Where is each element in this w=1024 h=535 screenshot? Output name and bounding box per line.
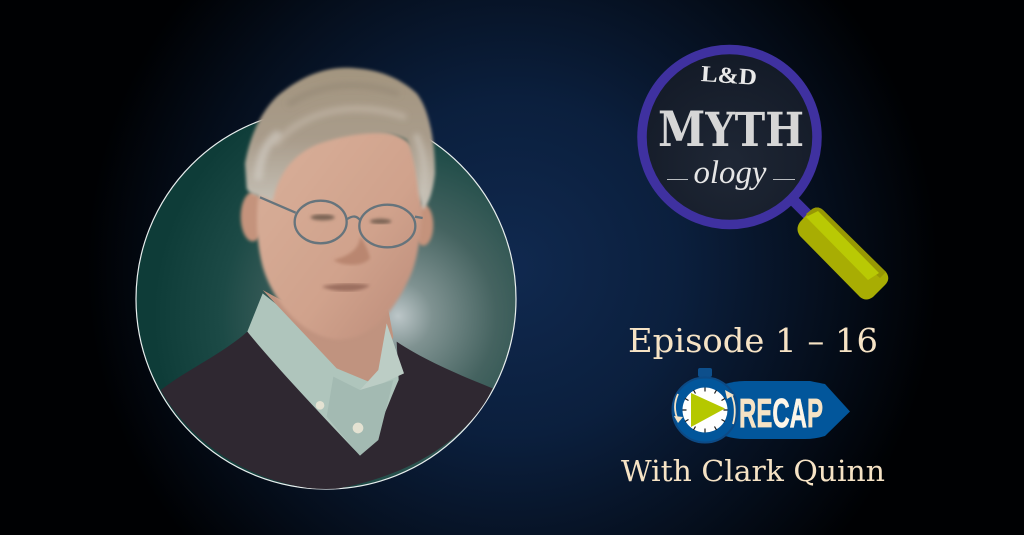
- ears: [241, 192, 433, 246]
- nose shadow: [333, 237, 370, 265]
- shirt placket shading: [327, 377, 393, 456]
- recap banner arrow: [725, 381, 850, 439]
- collar right wing: [360, 323, 404, 390]
- neck: [263, 290, 393, 385]
- logo text: L&D: L&D: [700, 61, 758, 90]
- magnifier rod: [791, 198, 811, 218]
- badge: stopwatch recap: [672, 368, 850, 442]
- logo text: MYTH: MYTH: [658, 100, 804, 158]
- logo side rules: [667, 178, 795, 180]
- stopwatch body: [672, 378, 738, 442]
- mouth: [322, 283, 370, 291]
- stopwatch ticks: [682, 388, 728, 432]
- logo text: ology: ology: [694, 155, 767, 191]
- collar buttons: [316, 401, 363, 433]
- hair highlights: [258, 85, 425, 193]
- glasses: [260, 197, 423, 247]
- face: [257, 124, 422, 339]
- subheading: guest name: With Clark Quinn: [621, 454, 885, 488]
- stopwatch crown: [698, 368, 712, 377]
- logo: L&D Mythology magnifying glass: [642, 50, 888, 300]
- sweater: [161, 332, 493, 490]
- stopwatch face: [682, 388, 728, 432]
- rotation arrows: [675, 394, 735, 424]
- portrait: circular photo of Clark Quinn: [136, 68, 516, 490]
- play triangle: [691, 393, 725, 427]
- eyes: [311, 214, 391, 224]
- portrait backdrop circle: [136, 109, 516, 489]
- recap label: RECAP: [739, 390, 823, 436]
- hair: [245, 68, 435, 210]
- infographic canvas: [108, 0, 915, 535]
- arrow heads: [674, 390, 734, 423]
- magnifier lens: [642, 50, 817, 224]
- portrait figure: [161, 68, 493, 490]
- shirt: [247, 293, 404, 456]
- magnifier handle: [798, 208, 888, 300]
- heading: episode range: Episode 1 – 16: [628, 321, 878, 360]
